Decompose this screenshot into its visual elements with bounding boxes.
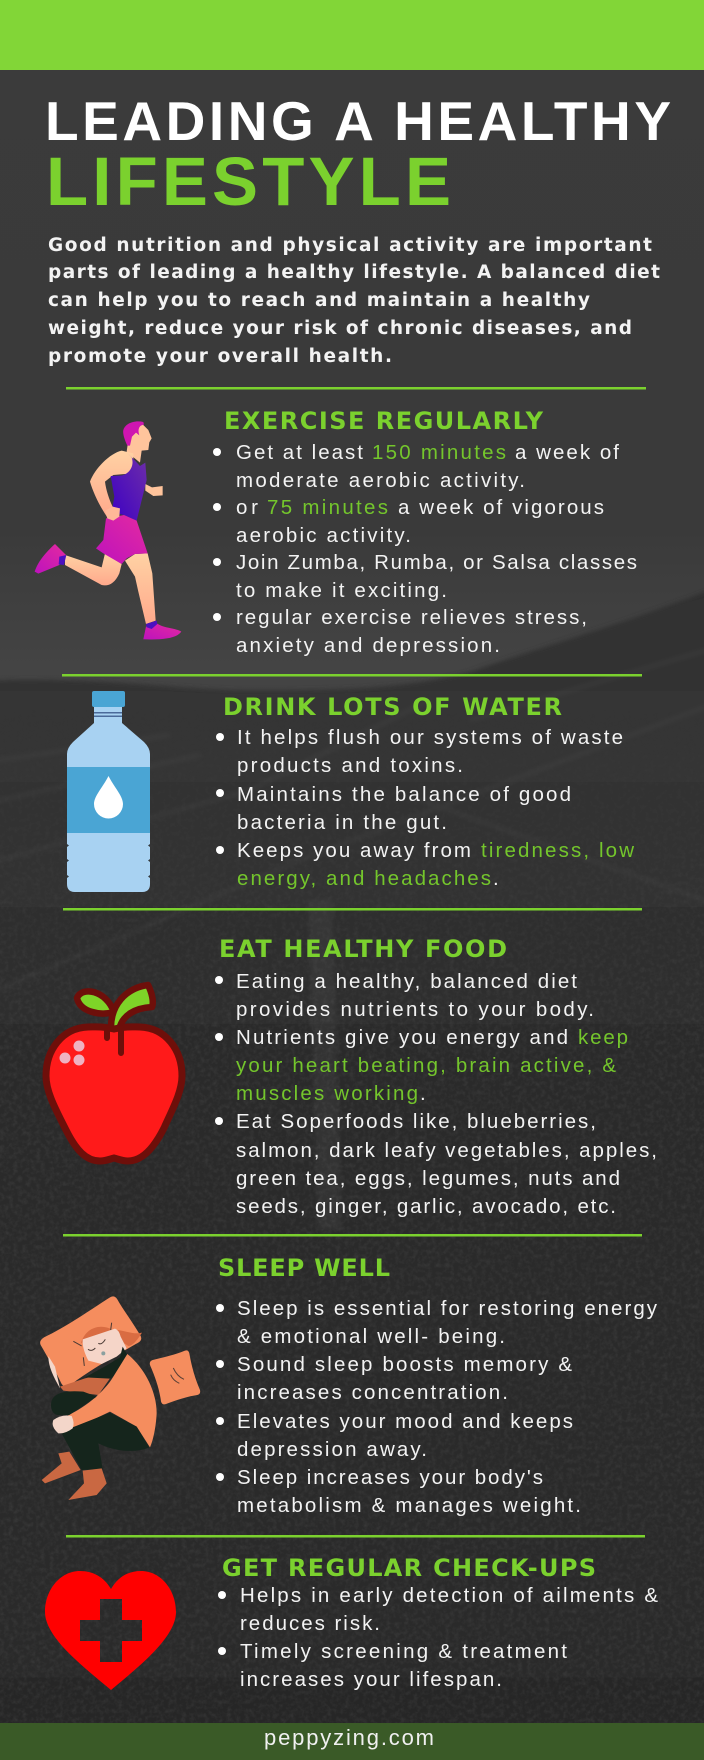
exercise bullets: regular exercise relieves stress, [236,606,587,629]
icon: water bottle [67,691,150,892]
exercise bullets: aerobic activity. [236,524,411,547]
exercise bullets: moderate aerobic activity. [236,469,525,492]
water bullets: Maintains the balance of good [237,783,571,806]
sleep bullets: & emotional well- being. [237,1325,505,1348]
title: LIFESTYLE [46,143,451,220]
food bullets: Eating a healthy, balanced diet [236,970,577,993]
sleep bullets: metabolism & manages weight. [237,1494,581,1517]
exercise bullets: a week of vigorous [398,496,604,519]
icon: runner [35,421,181,639]
intro paragraph: parts of leading a healthy lifestyle. A balanced diet [48,262,660,283]
intro paragraph [48,235,660,367]
water bullets: It helps flush our systems of waste [237,726,623,749]
sleep bullets: Sound sleep boosts memory & [237,1353,572,1376]
icon: red apple [46,985,182,1161]
exercise bullets: Get at least [236,441,363,464]
sleep bullets: Elevates your mood and keeps [237,1410,573,1433]
panel: exercise regularly [35,407,637,657]
water bullets: . [493,867,499,890]
exercise bullets: 75 minutes [267,496,388,519]
top green band [0,0,704,70]
intro paragraph: weight, reduce your risk of chronic diseases, and [48,318,632,339]
water bullets: energy, and headaches [237,867,491,890]
check-up bullets: increases your lifespan. [240,1668,502,1691]
panel: sleep well [40,1254,658,1517]
heading: exercise regularly: EXERCISE REGULARLY [224,407,544,435]
food bullets: . [420,1082,426,1105]
exercise bullets [213,441,637,657]
sleep bullets [216,1297,658,1517]
exercise bullets: 150 minutes [372,441,506,464]
footer band [0,1723,704,1760]
check-up bullets: Timely screening & treatment [240,1640,567,1663]
exercise bullets: or [236,496,258,519]
food bullets: green tea, eggs, legumes, nuts and [236,1167,620,1190]
food bullets: provides nutrients to your body. [236,998,594,1021]
food bullets: your heart beating, brain active, & [236,1054,616,1077]
food bullets: seeds, ginger, garlic, avocado, etc. [236,1195,616,1218]
food bullets [215,970,657,1218]
water bullets: Keeps you away from [237,839,471,862]
intro paragraph: Good nutrition and physical activity are important [48,235,652,256]
sleep bullets: Sleep is essential for restoring energy [237,1297,658,1320]
icon: heart with cross [45,1571,176,1690]
sleep bullets: increases concentration. [237,1381,508,1404]
heading: sleep well: SLEEP WELL [218,1254,390,1282]
heading: drink lots of water: DRINK LOTS OF WATER [223,693,562,721]
water bullets: tiredness, low [481,839,634,862]
title: LEADING A HEALTHY [45,90,671,152]
panel: drink lots of water [67,691,634,892]
heading: check-ups: GET REGULAR CHECK-UPS [222,1554,596,1582]
exercise bullets: anxiety and depression. [236,634,500,657]
icon: sleeping person [40,1296,200,1500]
check-up bullets: reduces risk. [240,1612,380,1635]
title [45,90,671,220]
exercise bullets: Join Zumba, Rumba, or Salsa classes [236,551,637,574]
food bullets: salmon, dark leafy vegetables, apples, [236,1139,657,1162]
check-up bullets: Helps in early detection of ailments & [240,1584,658,1607]
intro paragraph: can help you to reach and maintain a healthy [48,290,590,311]
food bullets: Nutrients give you energy and [236,1026,568,1049]
water bullets: products and toxins. [237,754,463,777]
heading: eat healthy food: EAT HEALTHY FOOD [219,935,507,963]
background: dark road photo [0,544,704,1723]
food bullets: keep [578,1026,628,1049]
panel: get regular check-ups [45,1554,658,1691]
sleep bullets: depression away. [237,1438,427,1461]
check-up bullets [218,1584,658,1691]
food bullets: Eat Soperfoods like, blueberries, [236,1110,596,1133]
water bullets: bacteria in the gut. [237,811,447,834]
water bullets [216,726,634,890]
exercise bullets: to make it exciting. [236,579,447,602]
exercise bullets: a week of [515,441,619,464]
sleep bullets: Sleep increases your body's [237,1466,543,1489]
food bullets: muscles working [236,1082,418,1105]
panel: eat healthy food [46,935,657,1218]
intro paragraph: promote your overall health. [48,346,392,367]
footer band: peppyzing.com [264,1725,434,1750]
